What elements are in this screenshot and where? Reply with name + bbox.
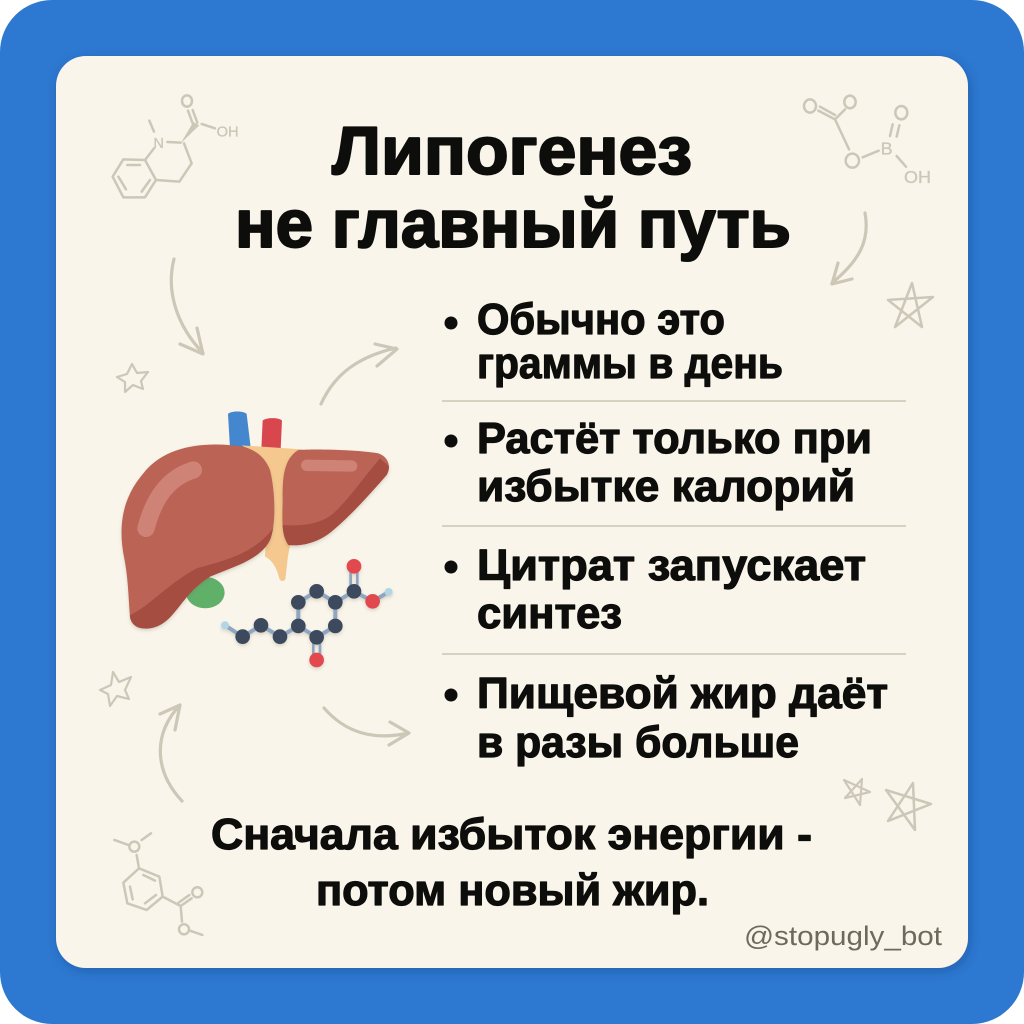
bullet: citrate: Цитрат запускает (477, 541, 866, 590)
icon: big star bottom right (886, 783, 931, 830)
icon: molecule bottom left (114, 833, 202, 935)
watermark handle: @stopugly_bot (744, 921, 943, 951)
bullet: citrate (444, 541, 866, 638)
icon: molecule top right (804, 96, 931, 187)
vessel: blue (228, 411, 251, 447)
conclusion text: потом новый жир. (316, 866, 709, 915)
icon: molecule top right: OH (904, 167, 931, 187)
bullet: grams per day (444, 295, 783, 388)
left lobe (122, 444, 280, 633)
arrow: top left (171, 259, 203, 354)
bullet: grams per day: граммы в день (477, 339, 783, 388)
arrow: centre down right (324, 708, 409, 745)
title: не главный путь (235, 186, 791, 262)
icon: molecule top left (113, 95, 239, 197)
bullet: calorie surplus: избытке калорий (477, 462, 855, 511)
icon: liver (122, 411, 393, 633)
title (235, 113, 791, 262)
arrow: top right (832, 213, 866, 284)
arrow: bottom left (160, 705, 182, 801)
title: Липогенез (332, 113, 692, 189)
bullet: grams per day: Обычно это (477, 295, 725, 344)
icon: star left (117, 364, 148, 392)
right lobe (280, 449, 393, 550)
bullet: calorie surplus: Растёт только при (477, 414, 872, 463)
icon: molecule top right: B (881, 139, 893, 159)
card panel (56, 56, 968, 968)
arrow: centre up right (321, 344, 397, 404)
bullet: dietary fat: в разы больше (477, 718, 799, 767)
bullet: dietary fat: Пищевой жир даёт (477, 669, 888, 718)
dividers (442, 400, 906, 655)
vessel: red (261, 418, 282, 450)
bullet: citrate: синтез (477, 589, 622, 638)
icon: molecule model (221, 559, 393, 667)
gallbladder (186, 577, 225, 608)
conclusion text: Сначала избыток энергии - (211, 810, 812, 859)
bullet: calorie surplus (444, 414, 872, 511)
icon: molecule top left: OH (217, 125, 239, 141)
icon: molecule top left: N (153, 136, 164, 152)
bullet: dietary fat (444, 669, 888, 767)
icon: star lower left (100, 672, 131, 706)
ligament (242, 445, 302, 581)
icon: star top right (888, 283, 933, 327)
conclusion text (211, 810, 812, 915)
icon: small star bottom right (844, 779, 870, 805)
